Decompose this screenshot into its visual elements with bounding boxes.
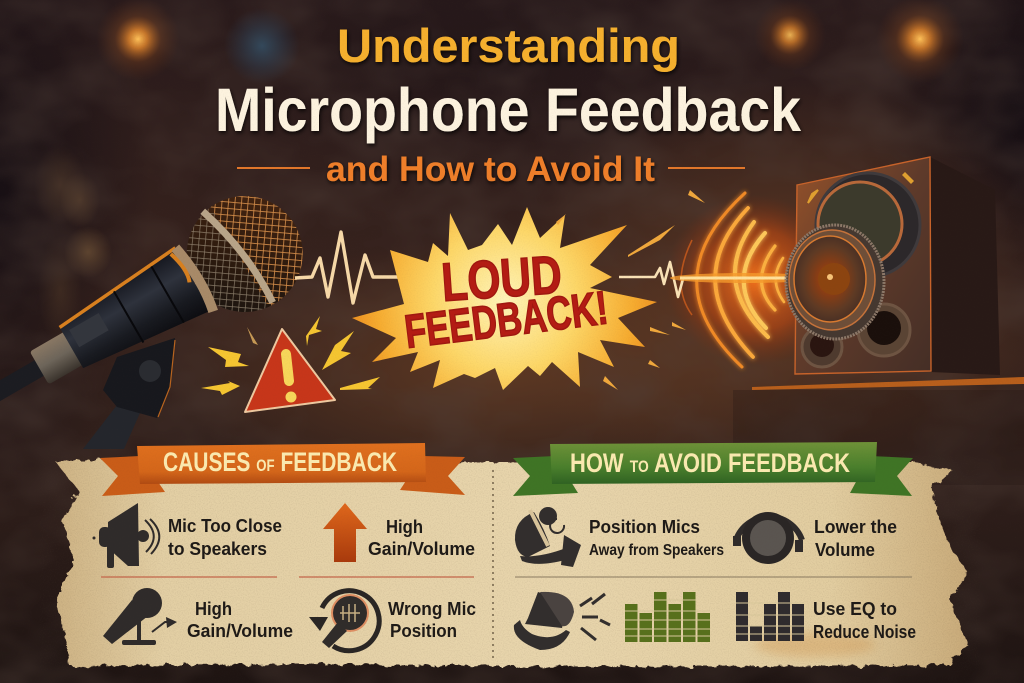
title: [215, 19, 801, 189]
lightning bolts: [201, 316, 380, 395]
label: [388, 599, 476, 641]
avoid: use eq label: Use EQ to: [813, 599, 897, 619]
woofer upper: [816, 173, 920, 277]
banner: how to avoid feedback: [513, 442, 913, 496]
banner heading: HOW TO AVOID FEEDBACK: [570, 448, 850, 478]
burst: loud feedback: [352, 207, 657, 390]
port left: [802, 327, 842, 367]
label: [368, 517, 475, 559]
speaker cabinet: [733, 157, 1024, 485]
label: Gain/Volume: [187, 621, 293, 641]
paper panel: [40, 455, 980, 670]
label: Volume: [815, 540, 875, 560]
icon: volume knob: [733, 512, 803, 564]
cause: mic too close: [92, 503, 282, 568]
title line 1: Understanding: [337, 19, 680, 72]
mic cable: [0, 359, 46, 409]
cabinet side: [930, 157, 1000, 375]
stage spotlights: [96, 0, 964, 84]
icon: mic on stand: [103, 588, 177, 645]
label: Lower the: [814, 517, 897, 537]
label: [589, 517, 724, 559]
label: Gain/Volume: [368, 539, 475, 559]
avoid: use eq label: [813, 599, 916, 642]
label: [814, 517, 897, 560]
cause: wrong mic position: [309, 591, 476, 651]
label: [187, 599, 293, 641]
icon: person holding mic: [515, 507, 581, 567]
microphone: [0, 196, 303, 449]
mic stand: [83, 338, 175, 449]
burst text: LOUD: [440, 245, 564, 313]
burst text: [402, 245, 611, 358]
avoid: megaphone icon: [514, 592, 610, 650]
burst sparks: [556, 190, 705, 390]
mic body: [55, 250, 211, 380]
avoid: lower the volume: [733, 512, 897, 564]
label: High: [386, 517, 423, 537]
icon: speaker: [92, 503, 159, 568]
front driver: [786, 225, 884, 339]
burst text: FEEDBACK!: [402, 280, 611, 358]
warning triangle: [245, 329, 335, 412]
cause: high gain arrow: [323, 503, 475, 562]
mic head band: [203, 203, 273, 310]
mic head grille: [186, 196, 303, 312]
chart: dark equalizer: [736, 592, 804, 641]
label: Wrong Mic: [388, 599, 476, 619]
mic waveform: [295, 232, 408, 303]
speaker waveform and beam: [619, 262, 820, 297]
banner: causes of feedback: [100, 443, 465, 496]
banner heading: CAUSES OF FEEDBACK: [163, 447, 397, 477]
avoid: use eq label: Reduce Noise: [813, 622, 916, 642]
port right: [858, 304, 910, 356]
mic connector: [30, 331, 85, 384]
shelf: [733, 377, 1024, 485]
avoid: position mics: [515, 507, 724, 567]
label: to Speakers: [168, 539, 267, 559]
burst shape: [352, 207, 657, 390]
label: Away from Speakers: [589, 542, 724, 559]
icon: mic with circular arrow: [309, 591, 379, 651]
speaker sound waves: [665, 193, 845, 367]
label: High: [195, 599, 232, 619]
icon: up arrow: [323, 503, 367, 562]
title line 2: Microphone Feedback: [215, 76, 801, 144]
label: Mic Too Close: [168, 516, 282, 536]
label: Position Mics: [589, 517, 700, 537]
chart: green equalizer: [625, 592, 710, 642]
cause: high gain mic: [103, 588, 293, 645]
title line 3: and How to Avoid It: [326, 150, 655, 189]
label: [168, 516, 282, 559]
cabinet front: [795, 157, 931, 374]
label: Position: [390, 621, 457, 641]
